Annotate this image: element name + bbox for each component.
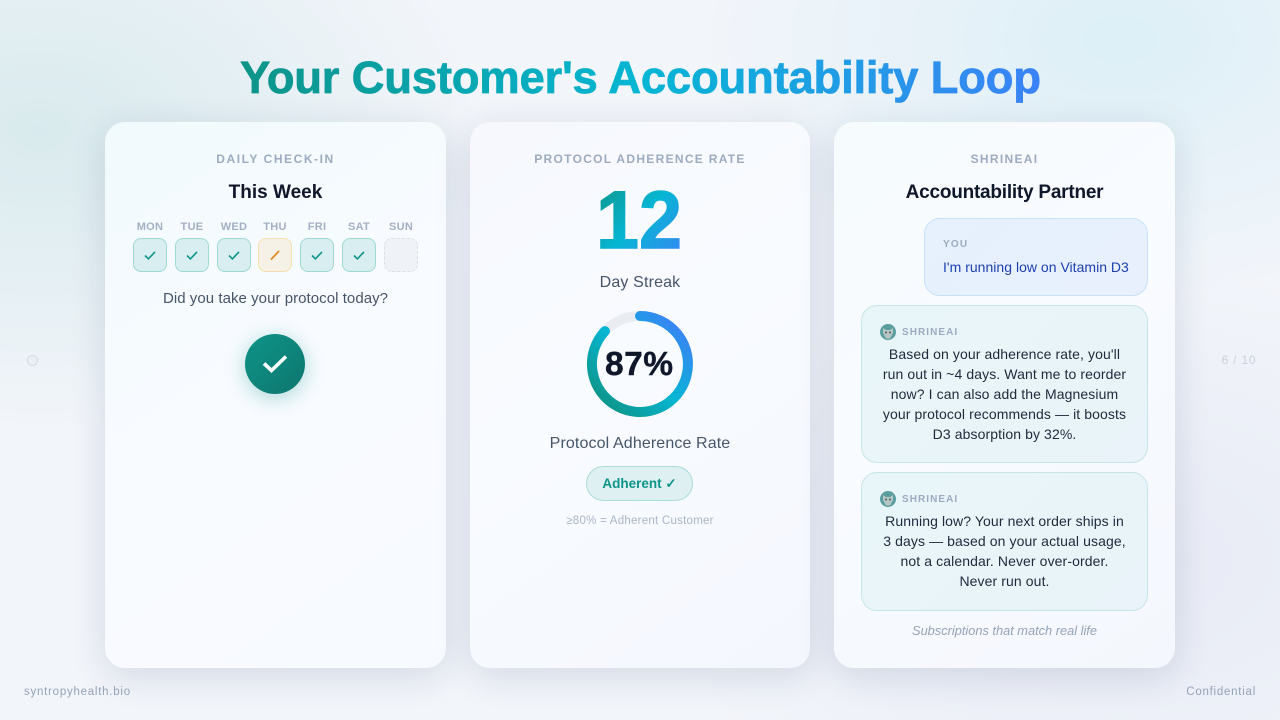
weekday labels and status boxes: SUN <box>389 221 413 233</box>
icon: avatar <box>880 324 896 340</box>
saturday checked <box>342 238 376 272</box>
ai message: Never run out. <box>959 573 1050 589</box>
streak caption: Day Streak <box>600 274 680 291</box>
ring value: 87% <box>605 346 673 383</box>
footer left: syntropyhealth.bio <box>24 686 131 698</box>
ai chat bubble two <box>861 472 1148 611</box>
weekday labels and status boxes: FRI <box>308 221 326 233</box>
ai name: SHRINEAI <box>902 494 958 505</box>
ai message: not a calendar. Never over-order. <box>901 553 1108 569</box>
adherent badge <box>586 466 693 501</box>
thursday partial <box>258 238 292 272</box>
check-in question: Did you take your protocol today? <box>163 290 388 307</box>
monday checked <box>133 238 167 272</box>
weekday labels and status boxes: SAT <box>348 221 370 233</box>
adherent badge: Adherent ✓ <box>602 476 677 491</box>
ring caption: Protocol Adherence Rate <box>550 435 730 452</box>
weekday labels and status boxes: MON <box>137 221 163 233</box>
ai message: now? I can also add the Magnesium <box>891 386 1118 402</box>
this week heading: This Week <box>229 182 322 203</box>
daily check-in label: DAILY CHECK-IN <box>216 152 335 166</box>
ai message: Running low? Your next order ships in <box>885 513 1124 529</box>
footer right: Confidential <box>1186 686 1256 698</box>
tagline: Subscriptions that match real life <box>912 623 1097 638</box>
panel: daily check-in <box>105 122 446 668</box>
adherence threshold note: ≥80% = Adherent Customer <box>566 515 714 527</box>
title: Your Customer's Accountability Loop <box>240 52 1041 103</box>
sunday empty <box>384 238 418 272</box>
panel: adherence rate <box>470 122 810 668</box>
ai message: D3 absorption by 32%. <box>933 426 1076 442</box>
ai message: 3 days — based on your actual usage, <box>883 533 1126 549</box>
panel: accountability partner <box>834 122 1175 668</box>
icon: avatar <box>880 491 896 507</box>
weekday labels and status boxes: THU <box>263 221 287 233</box>
weekday labels and status boxes: TUE <box>181 221 203 233</box>
accountability partner heading: Accountability Partner <box>906 182 1103 203</box>
weekday labels and status boxes <box>133 221 418 272</box>
weekday labels and status boxes: WED <box>221 221 247 233</box>
user chat bubble <box>924 218 1148 296</box>
page number: 6 / 10 <box>1222 353 1256 367</box>
shrineai label: SHRINEAI <box>971 152 1038 166</box>
you label: YOU <box>943 239 968 250</box>
ai name: SHRINEAI <box>902 327 958 338</box>
ai message <box>882 346 1126 442</box>
friday checked <box>300 238 334 272</box>
icon: side logo <box>27 355 38 366</box>
adherence ring chart <box>586 311 693 417</box>
wednesday checked <box>217 238 251 272</box>
icon: confirm button <box>245 334 305 394</box>
ai message: your protocol recommends — it boosts <box>883 406 1126 422</box>
ai chat bubble one <box>861 305 1148 463</box>
ai message <box>883 513 1126 589</box>
adherence label: PROTOCOL ADHERENCE RATE <box>534 152 746 166</box>
user message: I'm running low on Vitamin D3 <box>943 259 1129 275</box>
ai message: run out in ~4 days. Want me to reorder <box>883 366 1126 382</box>
ai message: Based on your adherence rate, you'll <box>889 346 1120 362</box>
tuesday checked <box>175 238 209 272</box>
